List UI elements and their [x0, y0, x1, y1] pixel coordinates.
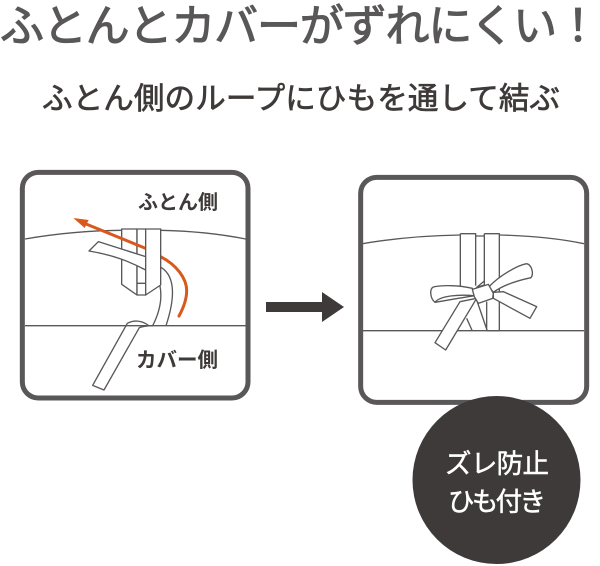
panel frame	[22, 172, 248, 398]
label: cover side: カバー側	[136, 349, 218, 372]
hanging strap	[467, 300, 487, 331]
subtitle: ふとん側のループにひもを通して結ぶ	[42, 82, 560, 116]
vertical straps	[460, 234, 499, 331]
panel frame	[361, 177, 587, 402]
lower strap	[93, 267, 172, 390]
upper strap	[89, 242, 146, 270]
badge circle: ひも付き	[448, 487, 546, 517]
orange arrow	[73, 218, 187, 316]
right tail	[493, 292, 537, 318]
panel: before tying	[22, 172, 248, 398]
badge circle	[412, 396, 580, 564]
badge text: ズレ防止	[445, 449, 549, 479]
left loop	[431, 286, 475, 302]
title: ふとんとカバーがずれにくい！	[0, 2, 600, 51]
arrow	[266, 292, 344, 322]
knot	[477, 281, 484, 287]
panel: after tying	[361, 177, 587, 402]
futon edge line	[363, 235, 584, 244]
cover edge line	[363, 329, 584, 333]
cover edge line	[25, 324, 246, 328]
label: futon side: ふとん側	[138, 191, 218, 214]
futon loop	[122, 229, 137, 295]
right loop	[489, 264, 532, 292]
front loop strip	[146, 229, 161, 295]
left tail	[435, 298, 477, 350]
bow	[431, 264, 537, 350]
futon edge line	[25, 230, 246, 239]
